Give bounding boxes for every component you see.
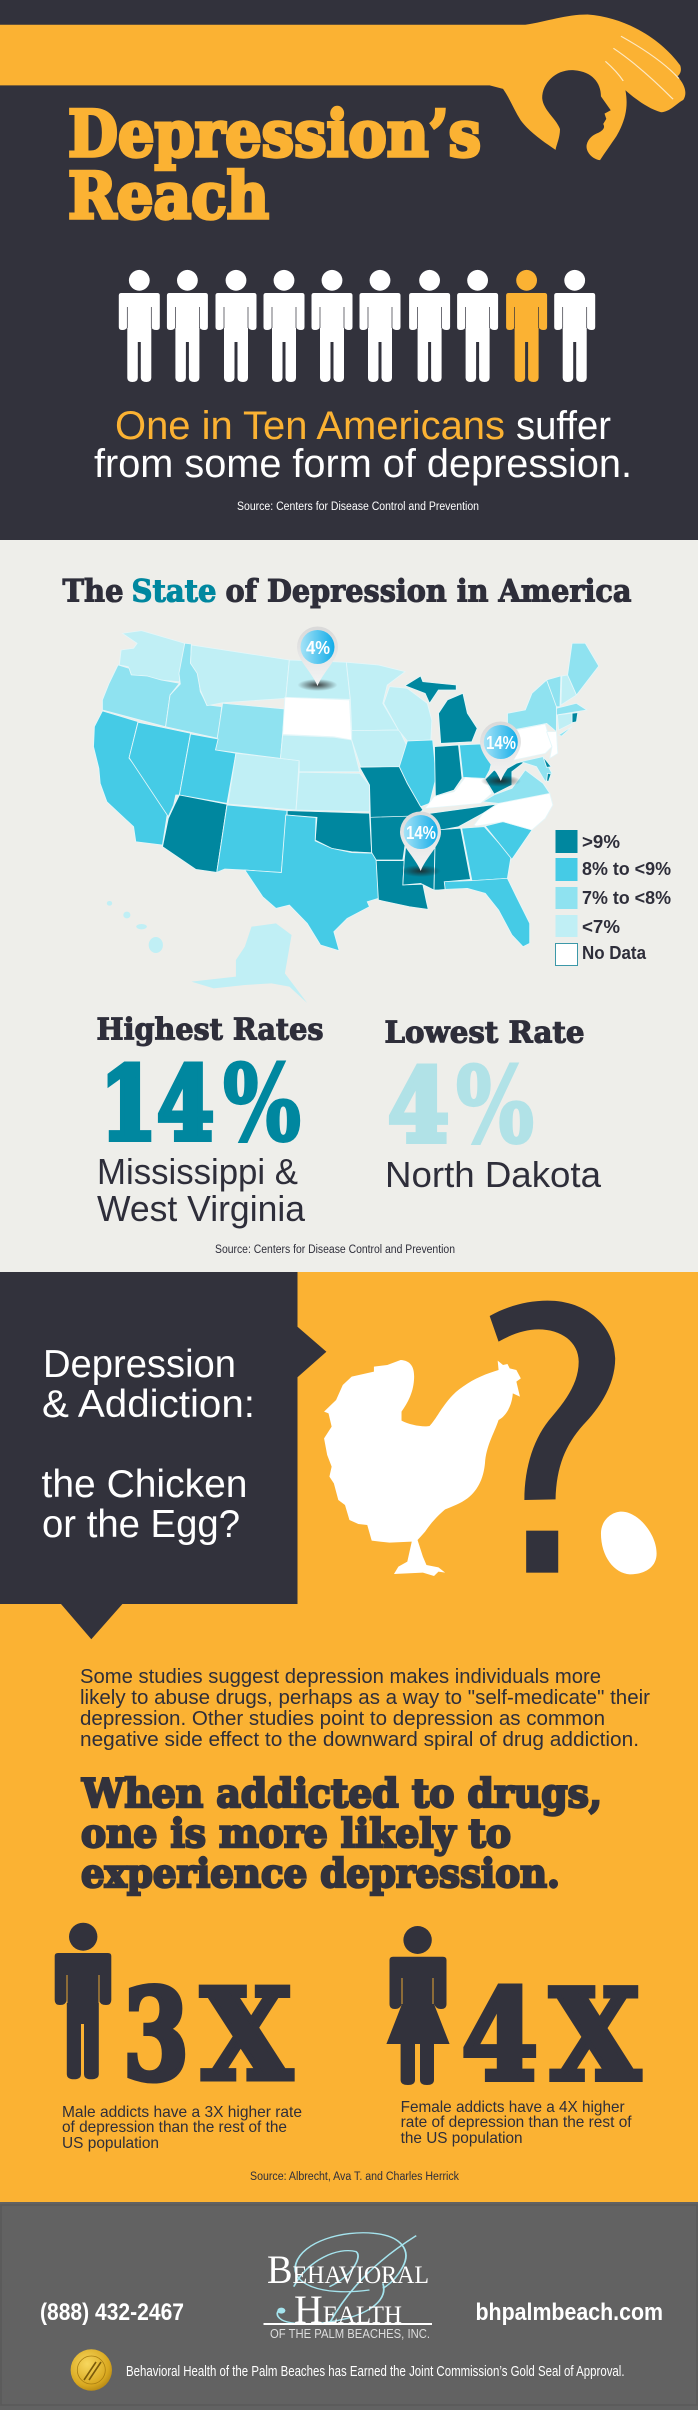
map pin: North Dakota 4% [297,626,338,691]
state: New Mexico [217,805,287,872]
state: Oklahoma [287,811,372,853]
stat: highest rates [96,1012,324,1229]
legend: <7% [582,916,620,937]
icon: person 4 [264,270,304,382]
icon: person 2 [167,270,208,382]
state: Michigan [405,676,477,743]
state: Ohio [459,744,494,778]
state: California [93,711,169,845]
heading: highest rates: Highest Rates [96,1012,324,1048]
source note: Source: Centers for Disease Control and Prevention [215,1244,455,1256]
bubble heading [42,1343,255,1546]
state: Oregon [102,665,179,727]
state: Iowa [352,730,407,767]
state: North Dakota: North Dakota [385,1154,602,1195]
state: Georgia [462,827,511,881]
number: 3X [123,1963,292,2109]
caption: female: the US population [401,2130,523,2147]
panel: footer [0,2202,698,2410]
state: Tennessee [407,804,496,831]
state: Kansas [296,772,369,812]
state: North Dakota [286,660,350,699]
icon: question mark [490,1301,615,1573]
number: 3X: 3 [123,1963,189,2109]
website: bhpalmbeach.com [476,2299,663,2326]
states: Mississippi and West Virginia: Mississippi & [97,1151,298,1192]
number: 3X: X [201,1963,292,2109]
icon: reaching arm and hand gripping a head [0,14,685,160]
state: Maryland [521,757,552,782]
body paragraph: likely to abuse drugs, perhaps as a way to "self-medicate" their [80,1687,650,1709]
state: New York [507,680,556,732]
bubble heading: the Chicken [42,1463,248,1506]
map pin: West Virginia 14% [480,722,521,787]
bold statement: experience depression. [81,1851,560,1897]
state: Wisconsin [384,687,432,741]
panel: depression and addiction [0,1272,698,2202]
icon: person 1 [119,270,160,382]
state: Louisiana [376,861,428,909]
source note: Source: Albrecht, Ava T. and Charles Herrick [250,2171,459,2183]
icon: highlighted person 9 [506,270,547,382]
state: Maine [568,643,599,695]
state: Washington [119,631,185,682]
number: 14%: 14 [100,1045,214,1163]
heading: lowest rate: Lowest Rate [384,1016,584,1050]
body paragraph: depression. Other studies point to depression as common [80,1708,605,1730]
state: New Jersey [547,732,558,758]
legend: >9% [582,831,620,852]
map of the United States [93,631,599,1003]
state: Delaware [543,757,551,767]
panel: header [0,0,698,540]
state: Long Island [559,727,572,736]
title: Reach [68,159,269,234]
number: 4%: % [456,1043,534,1167]
state: Rhode Island [572,713,578,723]
state: Alabama [434,828,471,890]
panel: state of depression [0,540,698,1272]
legend [556,830,671,966]
heading: State [132,574,216,610]
state: Illinois [399,740,436,807]
phone number: (888) 432-2467 [40,2299,184,2326]
pictogram: ten people, one highlighted [119,270,595,382]
tagline: suffer [516,404,611,448]
state: West Virginia [485,761,526,794]
state: Arkansas [370,816,414,860]
icon: person 8 [457,270,498,382]
number: 14%: % [223,1041,301,1165]
heading [62,574,632,610]
map pin: Mississippi 14%: 14% [406,823,436,843]
caption: male [62,2104,302,2152]
state: New Hampshire [561,675,576,705]
states: Mississippi and West Virginia: West Virginia [97,1188,306,1229]
bubble heading: & Addiction: [42,1383,255,1426]
stat: lowest rate [384,1016,602,1195]
state: Connecticut [557,713,572,730]
speech bubble [0,1272,326,1639]
state: Texas [245,815,378,951]
state: South Carolina [485,822,532,859]
caption: male: of depression than the rest of the [62,2119,287,2136]
tagline: from some form of depression. [94,442,632,486]
number: 4%: 4 [388,1047,449,1165]
state: Eastern Shore [547,773,551,782]
icon: person 7 [409,270,450,382]
heading: of Depression in America [226,574,632,610]
state: Pennsylvania [507,724,552,760]
caption: male: US population [62,2135,159,2152]
caption: female: rate of depression than the rest of [401,2114,632,2131]
logo: Behavioral Health: BEHAVIORAL [267,2247,429,2292]
heading: The [62,574,124,610]
state: North Carolina [474,793,553,830]
state: Nevada [129,722,191,817]
state: Montana [191,645,289,706]
state: Idaho [166,643,222,738]
icon: person 5 [312,270,352,382]
icon: male figure [55,1923,111,2079]
logo: Behavioral Health [264,2233,432,2341]
icon: gold seal [71,2349,112,2391]
icon: egg [601,1512,657,1574]
body paragraph [80,1666,650,1751]
caption: female [401,2099,632,2147]
logo: Behavioral Health: HEALTH [294,2287,402,2332]
state: Kentucky [425,777,492,808]
bold statement: one is more likely to [81,1811,511,1857]
map pin: Mississippi 14% [400,812,441,877]
icon: person 10 [554,270,595,382]
number: 4X: 4 [462,1963,538,2109]
states: Mississippi and West Virginia [97,1151,306,1229]
state: Alaska [191,923,307,1003]
state: Utah [179,734,236,803]
state: Minnesota [346,662,405,731]
map pin: West Virginia 14%: 14% [486,733,516,753]
bubble heading: Depression [43,1343,236,1386]
tagline [94,404,632,486]
state: Colorado [228,753,299,810]
legend: 8% to <9% [582,858,671,879]
number: 4% [388,1043,534,1167]
icon: person 6 [360,270,400,382]
stat: female 4X [386,1926,640,2147]
icon: person 3 [216,270,256,382]
state: Mississippi [403,830,435,890]
bold statement [81,1771,602,1897]
number: 14% [100,1041,301,1165]
state: South Dakota [283,697,352,740]
caption: female: Female addicts have a 4X higher [401,2099,625,2116]
state: Massachusetts [556,703,587,715]
state: Virginia [483,770,550,803]
caption: male: Male addicts have a 3X higher rate [62,2104,302,2121]
title: Depression’s [68,97,481,172]
icon: rooster silhouette [324,1360,521,1576]
body paragraph: Some studies suggest depression makes individuals more [80,1666,601,1688]
state: Wyoming [215,703,285,758]
bold statement: When addicted to drugs, [81,1771,602,1817]
logo: Behavioral Health: OF THE PALM BEACHES, INC. [270,2326,430,2341]
number: 4X: X [550,1963,640,2109]
state: Vermont [547,676,561,707]
state: Arizona [162,795,227,872]
state: Hawaii [107,901,163,953]
body paragraph: negative side effect to the downward spiral of drug addiction. [80,1729,639,1751]
map pin: North Dakota 4%: 4% [306,638,330,658]
state: Indiana [434,745,462,796]
title [68,97,481,234]
state: Florida [444,878,530,947]
icon: female figure [386,1926,450,2085]
bubble heading: or the Egg? [42,1503,240,1546]
number: 4X [462,1963,640,2109]
source note: Source: Centers for Disease Control and Prevention [237,501,479,513]
tagline: One in Ten Americans [115,404,505,448]
state: Nebraska [280,735,360,772]
legend: No Data [582,942,647,963]
state: Missouri [360,767,423,817]
legend: 7% to <8% [582,887,671,908]
stat: male 3X [55,1923,302,2152]
